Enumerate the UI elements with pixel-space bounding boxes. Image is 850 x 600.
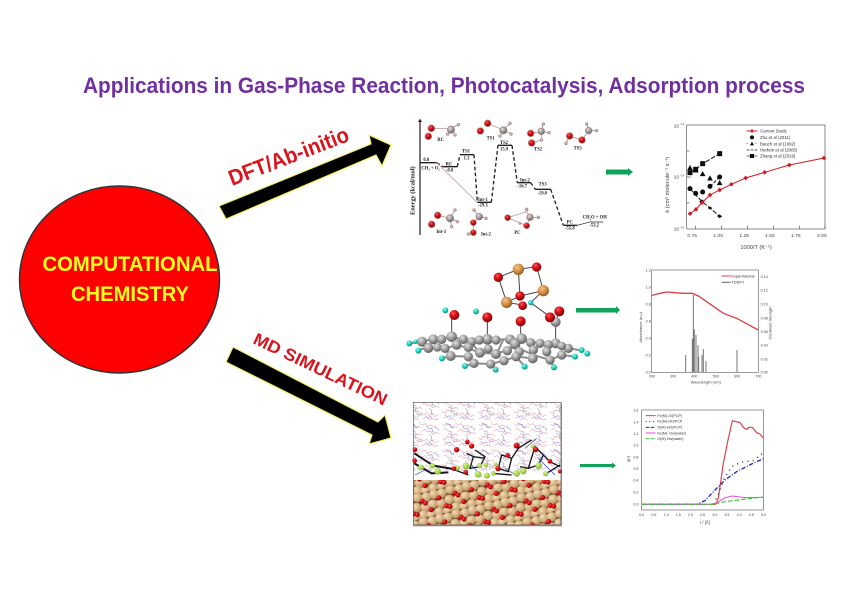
central ellipse: computational chemistry xyxy=(20,186,220,373)
legend: O(M)-HO(PCP) xyxy=(657,426,682,430)
axis tick labels: 1.4 xyxy=(633,420,638,424)
slab surface xyxy=(413,480,561,525)
black comparison series xyxy=(688,152,722,218)
energy labels: -53.2 xyxy=(589,223,600,228)
axis tick labels xyxy=(638,268,772,385)
axis tick labels: 0.2 xyxy=(633,490,638,494)
hydrogen atoms xyxy=(406,300,590,373)
axis tick labels: r / [Å] xyxy=(700,520,710,525)
legend: Bauch et al (1992) xyxy=(760,141,796,146)
legend: Fe(M)- Ow(water) xyxy=(657,431,686,435)
legend: Herbon et al (2005) xyxy=(760,147,798,152)
energy labels: -29.3 xyxy=(478,203,488,208)
axis tick labels: 500 xyxy=(713,374,719,378)
axis tick labels: 0.02 xyxy=(761,357,768,361)
axis tick labels: 1.0 xyxy=(664,513,669,517)
axis tick labels: Absorbance (a.u) xyxy=(638,311,643,343)
axis labels: 10 xyxy=(674,175,679,181)
axis labels: 1.00 xyxy=(713,233,723,239)
Fe-Ow/water curve xyxy=(642,496,763,504)
iron atoms xyxy=(501,264,549,308)
bonds xyxy=(409,267,582,369)
axis tick labels: 5.0 xyxy=(761,513,766,517)
central ellipse: computational chemistry: CHEMISTRY xyxy=(71,283,189,306)
water layer xyxy=(413,402,561,481)
axis tick labels: 1.2 xyxy=(633,432,638,436)
axis tick labels: 0.00 xyxy=(761,371,768,375)
energy axis xyxy=(409,119,422,235)
molecule structures xyxy=(425,120,598,236)
energy labels: PC xyxy=(567,220,573,225)
energy labels: 1.3 xyxy=(464,157,470,162)
graphene oxide with iron cluster model xyxy=(406,262,590,373)
energy labels: Int-1 xyxy=(478,198,488,203)
axis tick labels: 4.0 xyxy=(737,513,742,517)
axis tick labels: 700 xyxy=(755,374,761,378)
axis tick labels: 3.0 xyxy=(712,513,717,517)
green arrow: energy profile to rate chart xyxy=(606,168,633,176)
axis tick labels: 2.0 xyxy=(688,513,693,517)
axis tick labels: 0.0 xyxy=(633,502,638,506)
axis labels: 0.75 xyxy=(687,233,697,239)
plot frame xyxy=(642,410,763,510)
energy labels: -55.8 xyxy=(565,227,575,232)
axis labels: 1.50 xyxy=(765,233,775,239)
axis tick labels xyxy=(625,409,766,525)
axis tick labels: 200 xyxy=(649,374,655,378)
axis tick labels: 0.5 xyxy=(651,513,656,517)
central ellipse: computational chemistry: COMPUTATIONAL xyxy=(42,253,218,276)
green arrow: snapshot to RDF chart xyxy=(580,462,616,468)
axis tick labels: 0.04 xyxy=(761,344,768,348)
O-HO/PCP curve xyxy=(642,459,763,504)
energy labels: RC xyxy=(446,162,453,167)
molecule labels: RC xyxy=(437,138,445,143)
axis tick labels: 0.4 xyxy=(633,479,638,483)
axis labels: 1.25 xyxy=(739,233,749,239)
green and red atoms on surface xyxy=(412,440,562,479)
axis labels: -16 xyxy=(680,225,685,229)
energy labels: 0.0 xyxy=(423,158,430,163)
molecule labels xyxy=(436,137,582,237)
molecule labels: Int-2 xyxy=(481,232,491,237)
axis tick labels: g(r) xyxy=(625,455,630,462)
axis tick labels: 0.8 xyxy=(633,455,638,459)
legend: Current Study xyxy=(760,129,788,134)
axis tick labels: 4.5 xyxy=(749,513,754,517)
oxygen atoms xyxy=(449,262,564,326)
title: Applications in Gas-Phase Reaction, Photocatalysis, Adsorption process xyxy=(83,73,805,98)
legend: O(M)-Hw(water) xyxy=(657,437,684,441)
legend: Fe(M)-OH/PCP xyxy=(657,420,683,424)
axis tick labels: 3.5 xyxy=(724,513,729,517)
molecule labels: TS2 xyxy=(534,147,543,152)
axis tick labels: 0.06 xyxy=(761,330,768,334)
axis tick labels: 0.08 xyxy=(761,316,768,320)
axis tick labels: 0.2 xyxy=(646,354,651,358)
energy levels xyxy=(420,145,603,225)
TDDFT bars xyxy=(686,295,737,372)
energy labels xyxy=(421,141,607,232)
legend xyxy=(646,414,686,441)
energy labels: -0.8 xyxy=(446,168,454,173)
energy labels: TS1 xyxy=(462,149,471,154)
label: DFT/Ab-initio: DFT/Ab-initio xyxy=(225,122,352,191)
energy profile diagram xyxy=(409,119,607,237)
axis tick labels: 0.0 xyxy=(639,513,644,517)
energy labels: CH₃ + O₂ xyxy=(421,167,440,172)
arrow: to MD results xyxy=(226,347,391,444)
energy labels: -16.7 xyxy=(517,185,528,190)
axis tick labels: 0.8 xyxy=(646,303,651,307)
energy labels: TS2 xyxy=(500,141,509,146)
axis tick labels: 400 xyxy=(691,374,697,378)
axis tick labels: 0.12 xyxy=(761,289,768,293)
axis tick labels: 0.0 xyxy=(646,371,651,375)
axis tick labels: 0.4 xyxy=(646,337,651,341)
Fe-O/PCP curve xyxy=(642,421,763,504)
energy labels: Int-2 xyxy=(520,178,530,183)
energy labels: -19.0 xyxy=(537,191,548,196)
energy labels: TS3 xyxy=(539,183,547,188)
axis tick labels: 0.10 xyxy=(761,303,768,307)
axis tick labels: 1.2 xyxy=(646,268,651,272)
energy labels: 15.9 xyxy=(500,147,509,152)
axis labels: 10 xyxy=(674,227,679,233)
Fe-OH/PCP curve xyxy=(713,453,763,504)
legend: Fe(M)-O/(PCP) xyxy=(657,414,682,418)
legend: Experimental xyxy=(731,273,755,278)
adsorbed organic molecules xyxy=(414,438,560,477)
axis labels: -12 xyxy=(680,122,685,126)
axis tick labels: Wavelength (nm) xyxy=(691,380,722,385)
axis labels: 10 xyxy=(674,123,679,129)
MD simulation snapshot xyxy=(412,402,562,526)
axis labels xyxy=(665,122,827,251)
legend xyxy=(722,273,755,285)
legend xyxy=(747,129,798,159)
legend: TDDFT xyxy=(731,280,745,285)
axis tick labels: 2.5 xyxy=(700,513,705,517)
molecule labels: PC xyxy=(514,231,521,236)
rate constant chart xyxy=(665,122,827,251)
axis labels: 1000/T (K⁻¹) xyxy=(740,245,772,251)
radial distribution function chart xyxy=(625,409,766,525)
snapshot shadow and frame xyxy=(413,403,562,526)
legend: Zhang et al (2019) xyxy=(760,154,796,159)
plot frame xyxy=(652,270,758,372)
axis labels: 1.75 xyxy=(791,233,801,239)
axis tick labels: 300 xyxy=(670,374,676,378)
absorbance spectrum chart xyxy=(638,268,772,385)
green arrow: model to absorbance chart xyxy=(576,306,620,314)
experimental curve xyxy=(652,292,758,330)
legend: Zhu et al (2011) xyxy=(760,135,791,140)
molecule labels: TS1 xyxy=(487,137,495,142)
molecule labels: Int-1 xyxy=(436,230,447,235)
axis labels: k (cm³ molecule⁻¹ s⁻¹) xyxy=(665,157,671,213)
carbon sheet atoms xyxy=(417,317,573,369)
energy axis: Energy (kcal/mol) xyxy=(409,166,416,215)
axis tick labels: 600 xyxy=(734,374,740,378)
O-Hw/water curve xyxy=(642,497,763,504)
axis tick labels: Oscillator Strength xyxy=(767,307,772,339)
molecule labels: TS3 xyxy=(574,147,582,152)
axis tick labels: 1.6 xyxy=(633,409,638,413)
plot frame and ticks xyxy=(687,125,825,229)
label: MD SIMULATION: MD SIMULATION xyxy=(250,329,390,409)
axis tick labels: 0.14 xyxy=(761,275,768,279)
axis tick labels: 0.6 xyxy=(633,467,638,471)
axis labels: 2.00 xyxy=(817,233,827,239)
axis tick labels: 1.0 xyxy=(646,285,651,289)
energy labels: CH₂O + OH xyxy=(583,216,607,221)
axis labels: -14 xyxy=(680,173,685,177)
axis tick labels: 1.0 xyxy=(633,444,638,448)
arrow: to DFT results xyxy=(219,135,391,219)
current study series xyxy=(688,156,826,216)
axis tick labels: 1.5 xyxy=(676,513,681,517)
axis tick labels: 0.6 xyxy=(646,320,651,324)
